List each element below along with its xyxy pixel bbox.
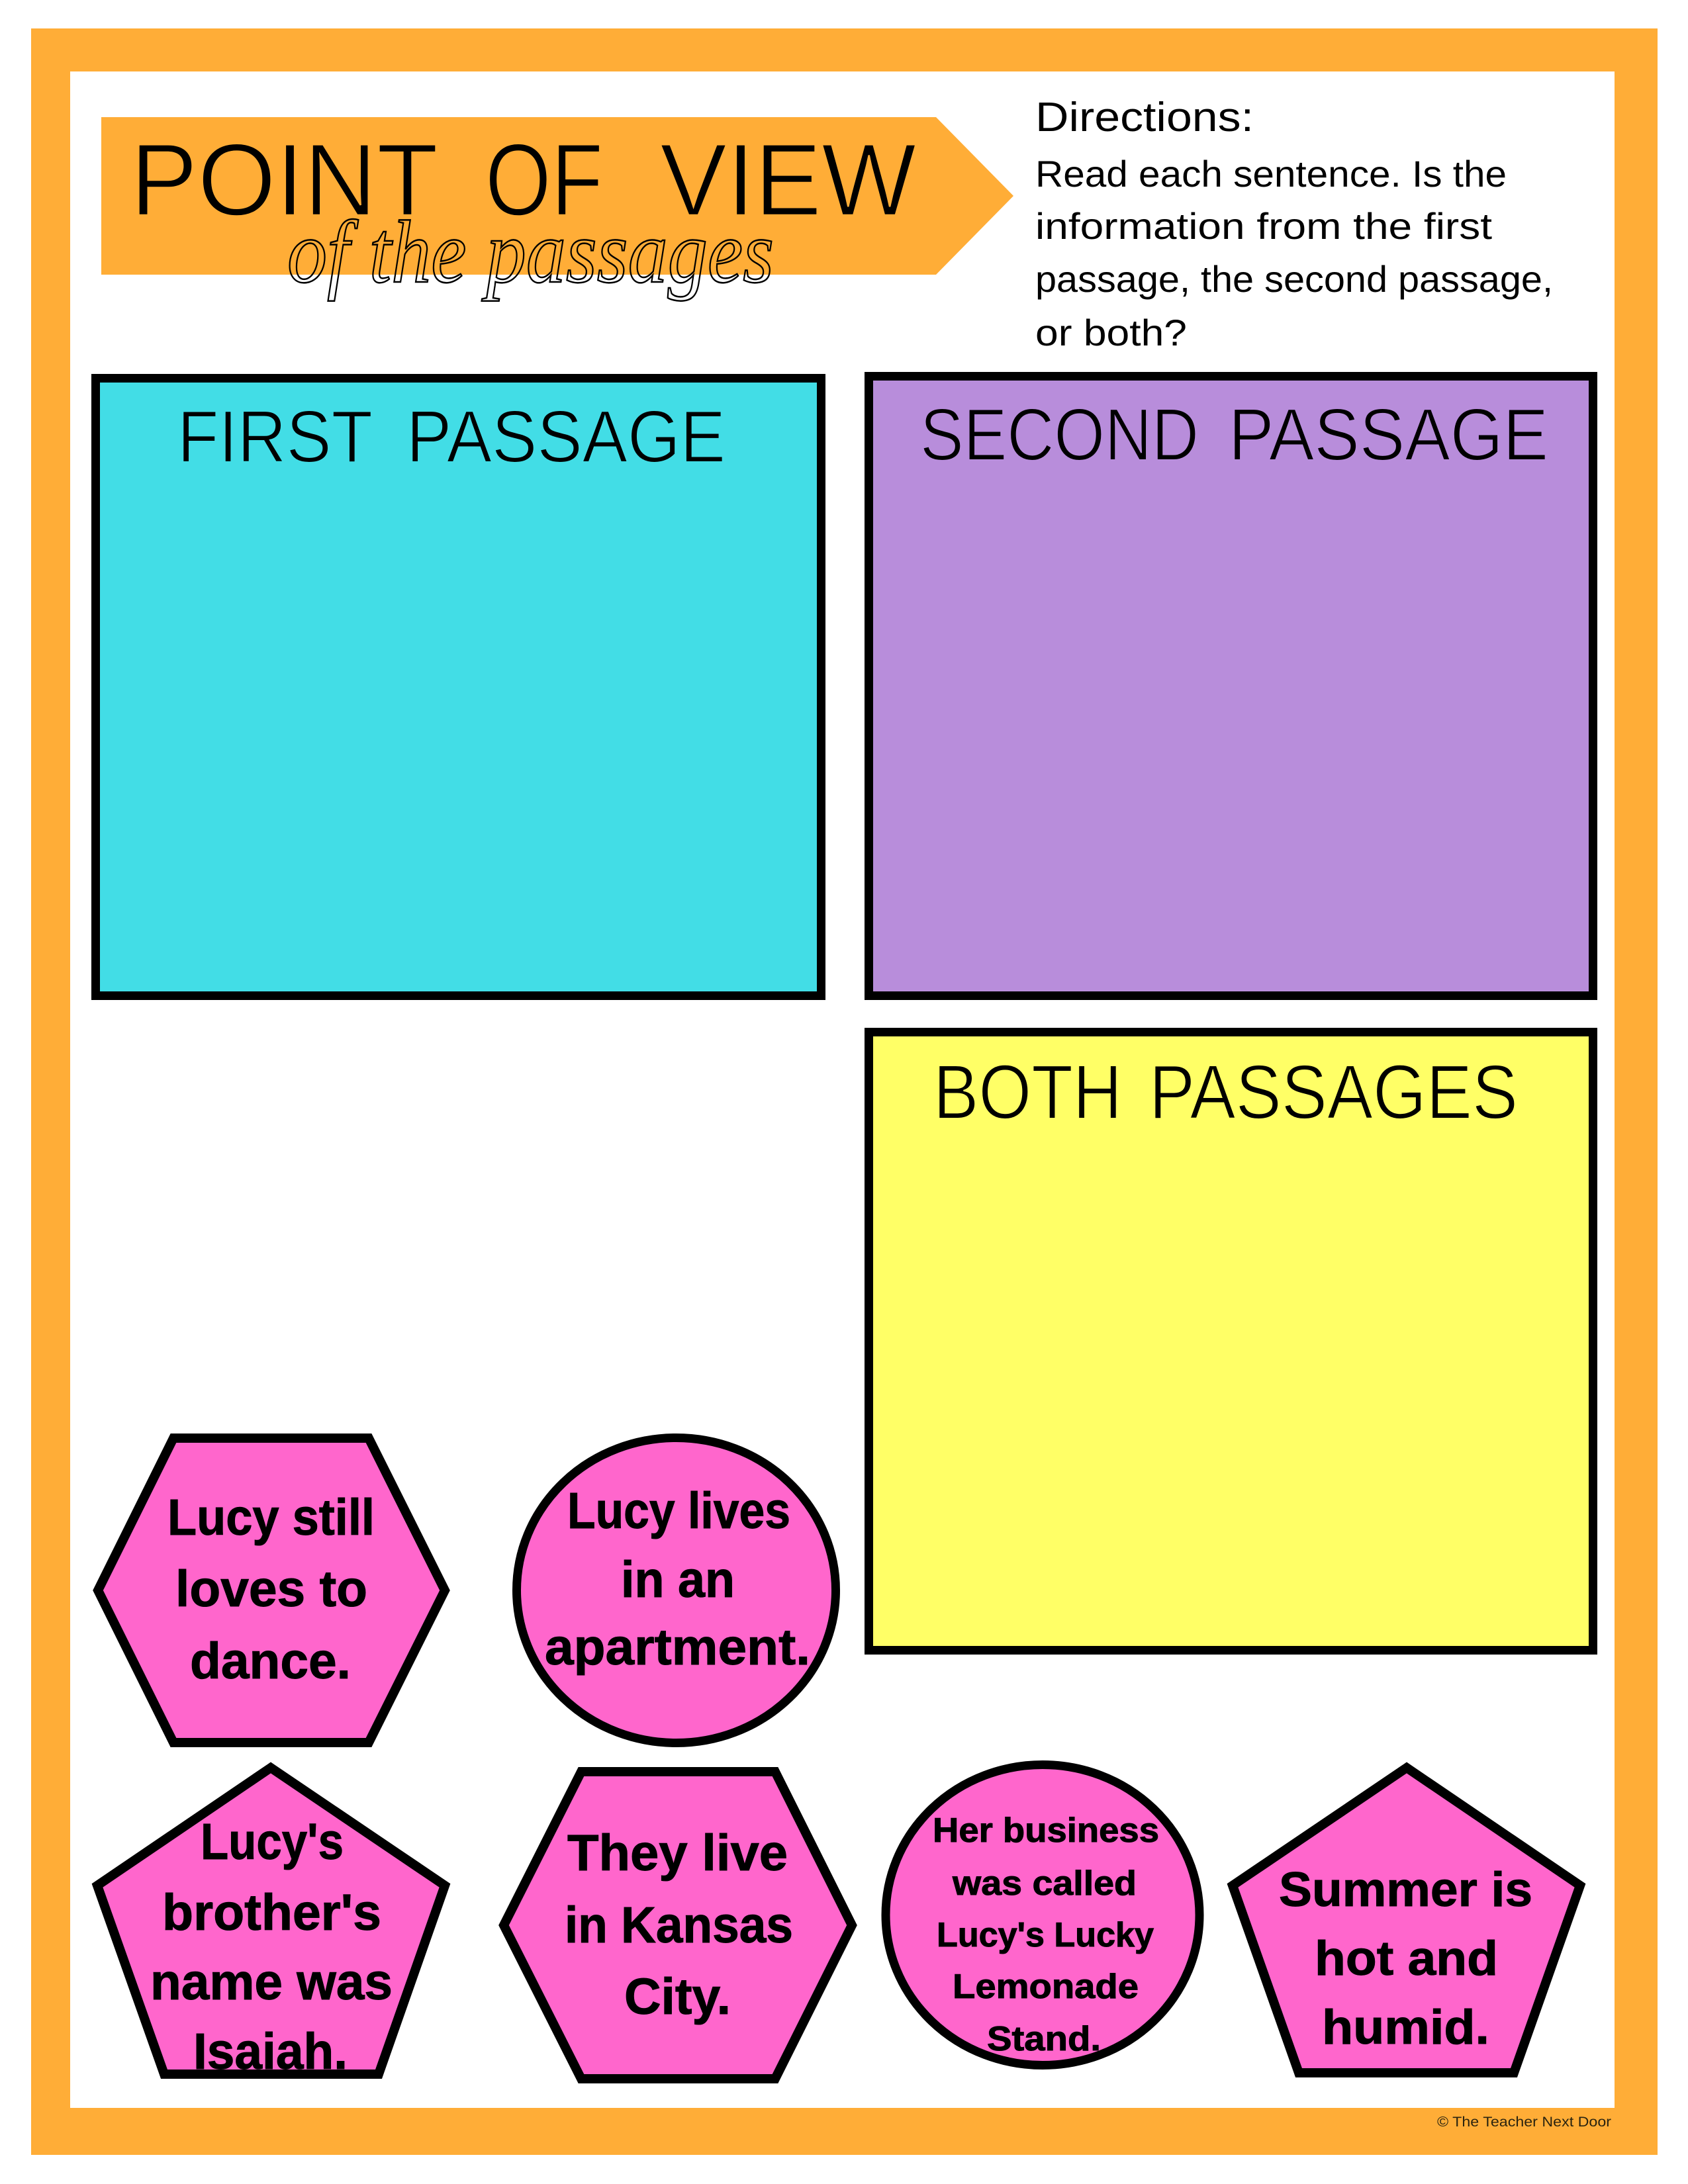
sentence card: pentagon, Summer is hot and humid [1233,1768,1580,2073]
card text: Isaiah. [193,2023,348,2080]
card text: apartment. [545,1619,810,1676]
heading: second passage: PASSAGE [1229,394,1548,476]
heading: second passage [920,394,1548,476]
title banner [101,117,1013,302]
card text: Lucy still [167,1489,375,1546]
heading: both passages [933,1049,1518,1135]
card text: in an [621,1551,735,1608]
card text: loves to [175,1561,367,1617]
copyright footer: © The Teacher Next Door [1437,2115,1611,2130]
heading: first passage: PASSAGE [406,396,726,478]
heading: first passage: FIRST [177,396,373,478]
sentence card: circle, Lucy lives in an apartment [516,1437,835,1743]
card text: was called [952,1864,1137,1903]
card text: Lucy's Lucky [937,1916,1154,1954]
card text: brother's [162,1884,381,1941]
directions text block: Read each sentence. Is the [1035,153,1507,195]
card text [933,1811,1159,2058]
sentence card: oval, Her business was called Lucy's Lucky Lemonade Stand [886,1764,1199,2065]
heading: first passage [177,396,726,478]
directions text block: or both? [1035,312,1187,353]
card text [150,1813,393,2080]
card text [167,1489,375,1690]
card text: Stand. [987,2020,1101,2058]
card text: Lucy lives [567,1482,790,1539]
card text: Lemonade [953,1968,1139,2006]
title: Point of View: VIEW [660,122,916,237]
sentence card: pentagon, Lucy's brother's name was Isaiah [97,1768,445,2080]
card text: in Kansas [565,1897,793,1954]
panel: both passages [868,1032,1593,1651]
card text: hot and [1315,1932,1498,1985]
sentence card: hexagon, They live in Kansas City [504,1772,852,2079]
subtitle: of the passages: of the passages [287,203,774,302]
title: Point of View: POINT [130,122,438,237]
card text [1279,1863,1532,2054]
card text [565,1825,793,2025]
directions text block [1035,95,1553,353]
directions text block: information from the first [1035,205,1493,247]
card text: They live [567,1825,788,1882]
card text: Lucy's [201,1813,344,1870]
heading: both passages: BOTH [933,1049,1122,1135]
sentence card: hexagon, Lucy still loves to dance [98,1438,445,1743]
panel: second passage [868,376,1593,995]
panel: first passage [95,379,821,995]
card text: Her business [933,1811,1159,1850]
heading: both passages: PASSAGES [1149,1049,1518,1135]
title: Point of View [130,122,916,237]
heading: second passage: SECOND [920,394,1199,476]
card text: dance. [190,1633,351,1690]
card text: City. [624,1968,731,2025]
card text: humid. [1322,2001,1489,2054]
card text [545,1482,810,1676]
card text: Summer is [1279,1863,1532,1917]
card text: name was [150,1954,393,2011]
title: Point of View: OF [485,122,603,237]
directions text block: Directions: [1035,95,1254,140]
directions text block: passage, the second passage, [1035,258,1553,300]
